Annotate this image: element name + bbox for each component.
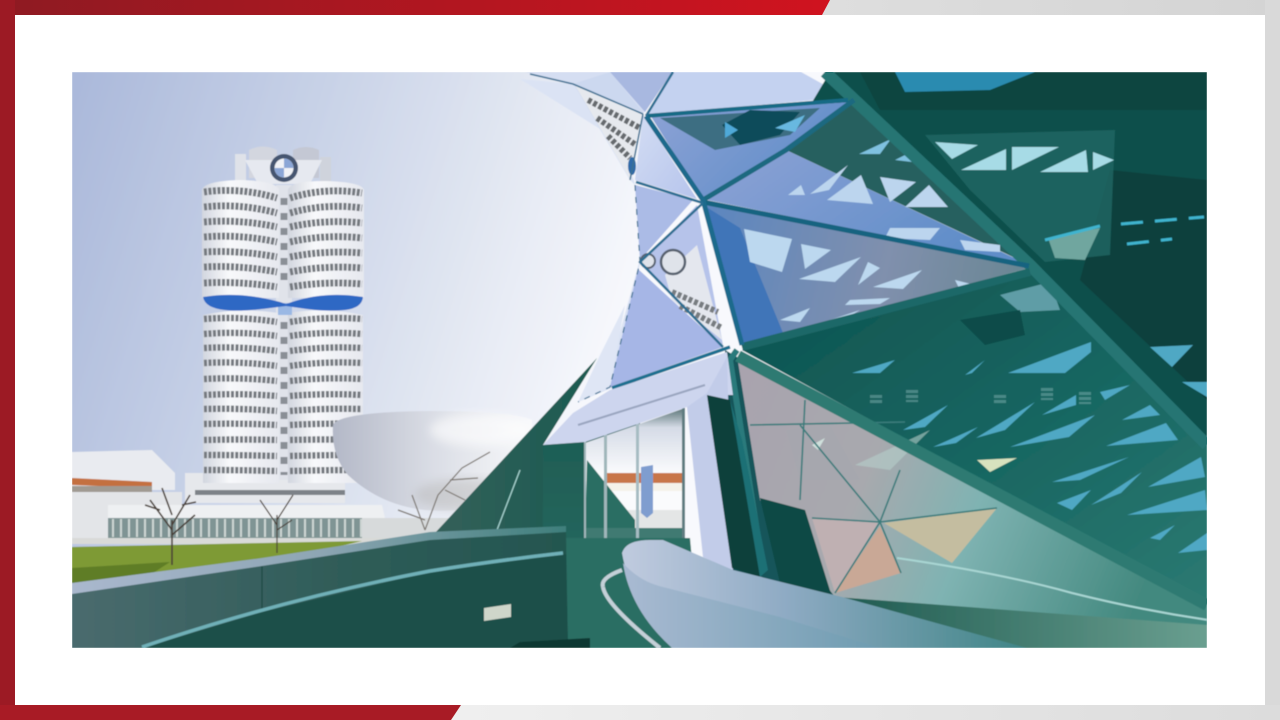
- grass: [72, 540, 362, 573]
- backing behind lower glazing edge: [725, 350, 835, 597]
- right curved ledge: [603, 540, 1027, 648]
- reflection of tower on roof: [575, 85, 722, 340]
- BMW roundel: [270, 154, 298, 182]
- floor region: [835, 597, 1207, 648]
- teal triangular roof support: [435, 358, 597, 533]
- ceiling fixtures row: [876, 388, 1085, 405]
- tower core: [276, 185, 292, 480]
- entrance canopy and frame: [543, 352, 768, 577]
- panel: mid dark teal glass with light strips: [742, 270, 1207, 603]
- upper cylinders: [202, 180, 364, 298]
- panel: upper bright triangle: [703, 150, 1029, 265]
- blue strip along left edge: [708, 208, 783, 343]
- window rows, lower section: [204, 318, 362, 471]
- blue band between cylinder sections: [203, 295, 363, 315]
- structural struts: [530, 72, 1207, 605]
- reflected BMW roundel: [661, 250, 685, 274]
- panel: dark triangle under the top strut: [788, 105, 1013, 258]
- warm tinted panes: [812, 430, 996, 593]
- lower cylinders: [203, 310, 363, 483]
- sky: [72, 72, 1025, 552]
- main diagonal strut: [825, 72, 1207, 445]
- reflection ring on the glass: [660, 108, 820, 150]
- dark glass background on the right: [785, 72, 1207, 440]
- panel: lower glass triangle: [706, 204, 1026, 333]
- dark patch: [960, 310, 1025, 345]
- wall light: [484, 604, 511, 621]
- yellow reflection: [977, 458, 1017, 472]
- bare trees: [145, 452, 490, 565]
- handrail reflection: [897, 558, 1208, 620]
- upper reflection in dark glass: [925, 130, 1204, 262]
- photo: BMW headquarters and BMW Welt: [72, 72, 1208, 648]
- panel: lower glazing near floor: [738, 362, 1207, 648]
- dark reveal beside the panes: [760, 498, 832, 597]
- glazing bars: [750, 400, 997, 593]
- light strips: [852, 342, 1207, 553]
- window rows, upper section: [204, 190, 362, 287]
- long lower strut: [738, 356, 1207, 605]
- lower floor beside the ledge: [565, 538, 700, 648]
- tower crown: [235, 146, 331, 184]
- curved roof: pale panels: [520, 72, 846, 402]
- lower panel cutouts: [744, 229, 975, 322]
- left balcony wall: [72, 526, 590, 648]
- panel: blue-violet glass: [650, 102, 850, 199]
- upper panel cutouts: [788, 165, 1000, 252]
- glazed entrance with exterior view: [584, 408, 685, 540]
- entrance wall behind canopy: [543, 420, 640, 648]
- background buildings: [72, 450, 452, 544]
- core windows: [280, 198, 288, 475]
- patch under node: [1000, 282, 1060, 312]
- BMW four-cylinder tower: [202, 146, 364, 483]
- bowl-shaped BMW Museum: [333, 411, 532, 511]
- curved handrail: [142, 553, 563, 647]
